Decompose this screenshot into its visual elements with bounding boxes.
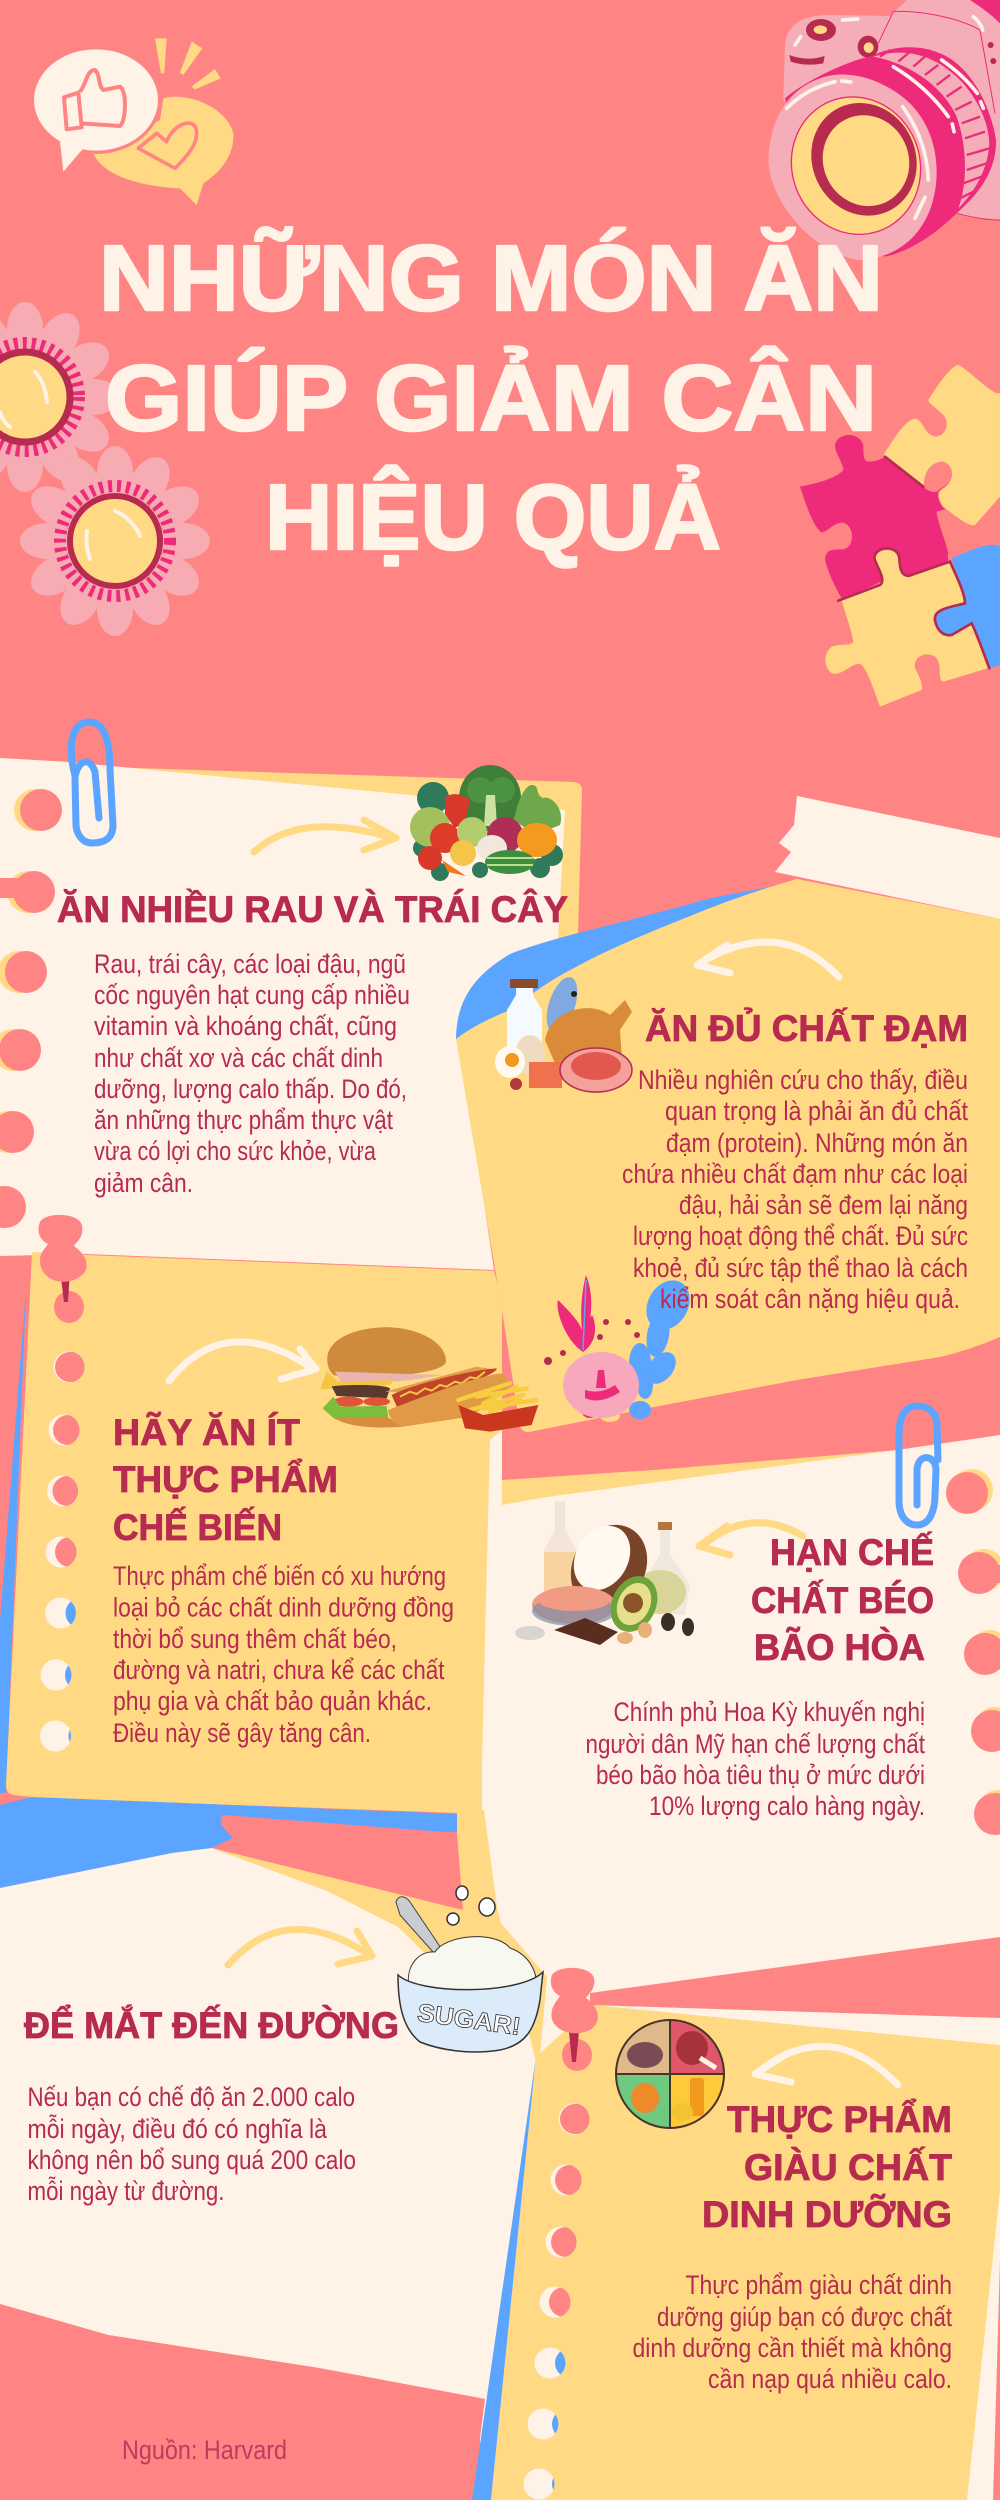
icon: protein foods [495,973,632,1092]
text block: đường và natri, chưa kể các chất [113,1655,445,1685]
decoration: flower left top [0,302,120,492]
panel: hãy ăn ít thực phẩm chế biến [0,1215,538,1815]
heading: HẠN CHẾ [770,1532,934,1573]
icon: pushpin [38,1215,87,1323]
panel: ăn nhiều rau và trái cây [0,722,582,1270]
source area background [0,2304,485,2500]
icon: blue paperclip [899,1406,938,1525]
text block [622,1065,968,1314]
title: HIỆU QUẢ [265,465,721,569]
text block [586,1697,925,1821]
arrow [699,1523,803,1555]
panel: hạn chế chất béo bão hòa [480,1406,1000,2500]
text block: Chính phủ Hoa Kỳ khuyến nghị [614,1697,925,1727]
decoration: flower left bottom [20,446,210,636]
icon: blue paperclip [71,722,113,843]
title: NHỮNG MÓN ĂN [99,226,883,330]
panel: ăn đủ chất đạm [456,796,1000,1432]
icon: pushpin [551,1968,598,2071]
text block: mỗi ngày từ đường. [28,2175,224,2206]
text block: người dân Mỹ hạn chế lượng chất [586,1729,925,1759]
heading: GIÀU CHẤT [744,2147,952,2188]
text block: béo bão hòa tiêu thụ ở mức dưới [596,1760,925,1790]
source note: Nguồn: Harvard [122,2435,287,2465]
icon: like and heart speech bubbles [31,38,233,205]
text block [28,2082,356,2206]
text block: 10% lượng calo hàng ngày. [649,1791,925,1821]
text block: dưỡng, lượng calo thấp. Do đó, [94,1074,407,1104]
icon: vegetables [410,765,563,881]
heading: ĐỂ MẮT ĐẾN ĐƯỜNG [24,2004,399,2046]
text block: dinh dưỡng cần thiết mà không [632,2333,952,2363]
panel: để mắt đến đường [0,1797,547,2399]
text block: không nên bổ sung quá 200 calo [28,2145,356,2175]
heading: BÃO HÒA [754,1626,925,1668]
text block [94,949,410,1198]
heading: HÃY ĂN ÍT [113,1411,300,1453]
text block: loại bỏ các chất dinh dưỡng đồng [113,1592,454,1622]
heading: THỰC PHẨM [727,2098,952,2140]
heading [702,2098,952,2235]
icon: sugar bowl: SUGAR! [416,1999,522,2041]
text block: vitamin và khoáng chất, cũng [94,1011,397,1041]
text block: Thực phẩm chế biến có xu hướng [113,1561,446,1591]
heading: CHẤT BÉO [751,1580,934,1621]
icon: healthy fats [515,1501,694,1645]
text block: vừa có lợi cho sức khỏe, vừa [94,1136,377,1166]
text block: thời bổ sung thêm chất béo, [113,1624,397,1654]
text block [113,1561,454,1748]
text block: phụ gia và chất bảo quản khác. [113,1686,432,1716]
text block: Thực phẩm giàu chất dinh [686,2270,952,2300]
icon: burger, hot dog and fries [320,1327,538,1432]
arrow [169,1342,316,1381]
text block: cần nạp quá nhiều calo. [708,2364,952,2394]
decoration: puzzle pieces [800,365,1000,707]
title [99,226,883,569]
text block: Nếu bạn có chế độ ăn 2.000 calo [28,2082,355,2112]
text block: giảm cân. [94,1168,193,1198]
text block [632,2270,952,2394]
heading: CHẾ BIẾN [113,1507,282,1548]
decoration: pink flower and leaves [544,1272,698,1422]
arrow [254,820,396,852]
icon: pink camera [768,0,1000,260]
text block: ăn những thực phẩm thực vật [94,1105,393,1135]
icon: sugar bowl [396,1886,543,2052]
heading: THỰC PHẨM [113,1458,338,1500]
icon: food plate [616,2020,724,2128]
heading: ĂN NHIỀU RAU VÀ TRÁI CÂY [57,888,568,930]
text block: cốc nguyên hạt cung cấp nhiều [94,980,410,1010]
arrow [697,942,839,977]
text block: Điều này sẽ gây tăng cân. [113,1718,371,1748]
arrow [228,1929,372,1965]
heading: DINH DƯỠNG [702,2193,952,2235]
heading: ĂN ĐỦ CHẤT ĐẠM [645,1007,968,1049]
text block: mỗi ngày, điều đó có nghĩa là [28,2113,328,2144]
title: GIÚP GIẢM CÂN [105,346,877,450]
text block: như chất xơ và các chất dinh [94,1043,383,1073]
panel: thực phẩm giàu chất dinh dưỡng [472,1937,1000,2500]
heading [113,1411,338,1548]
text block: Rau, trái cây, các loại đậu, ngũ [94,949,406,979]
arrow [755,2046,898,2085]
heading [751,1532,934,1668]
